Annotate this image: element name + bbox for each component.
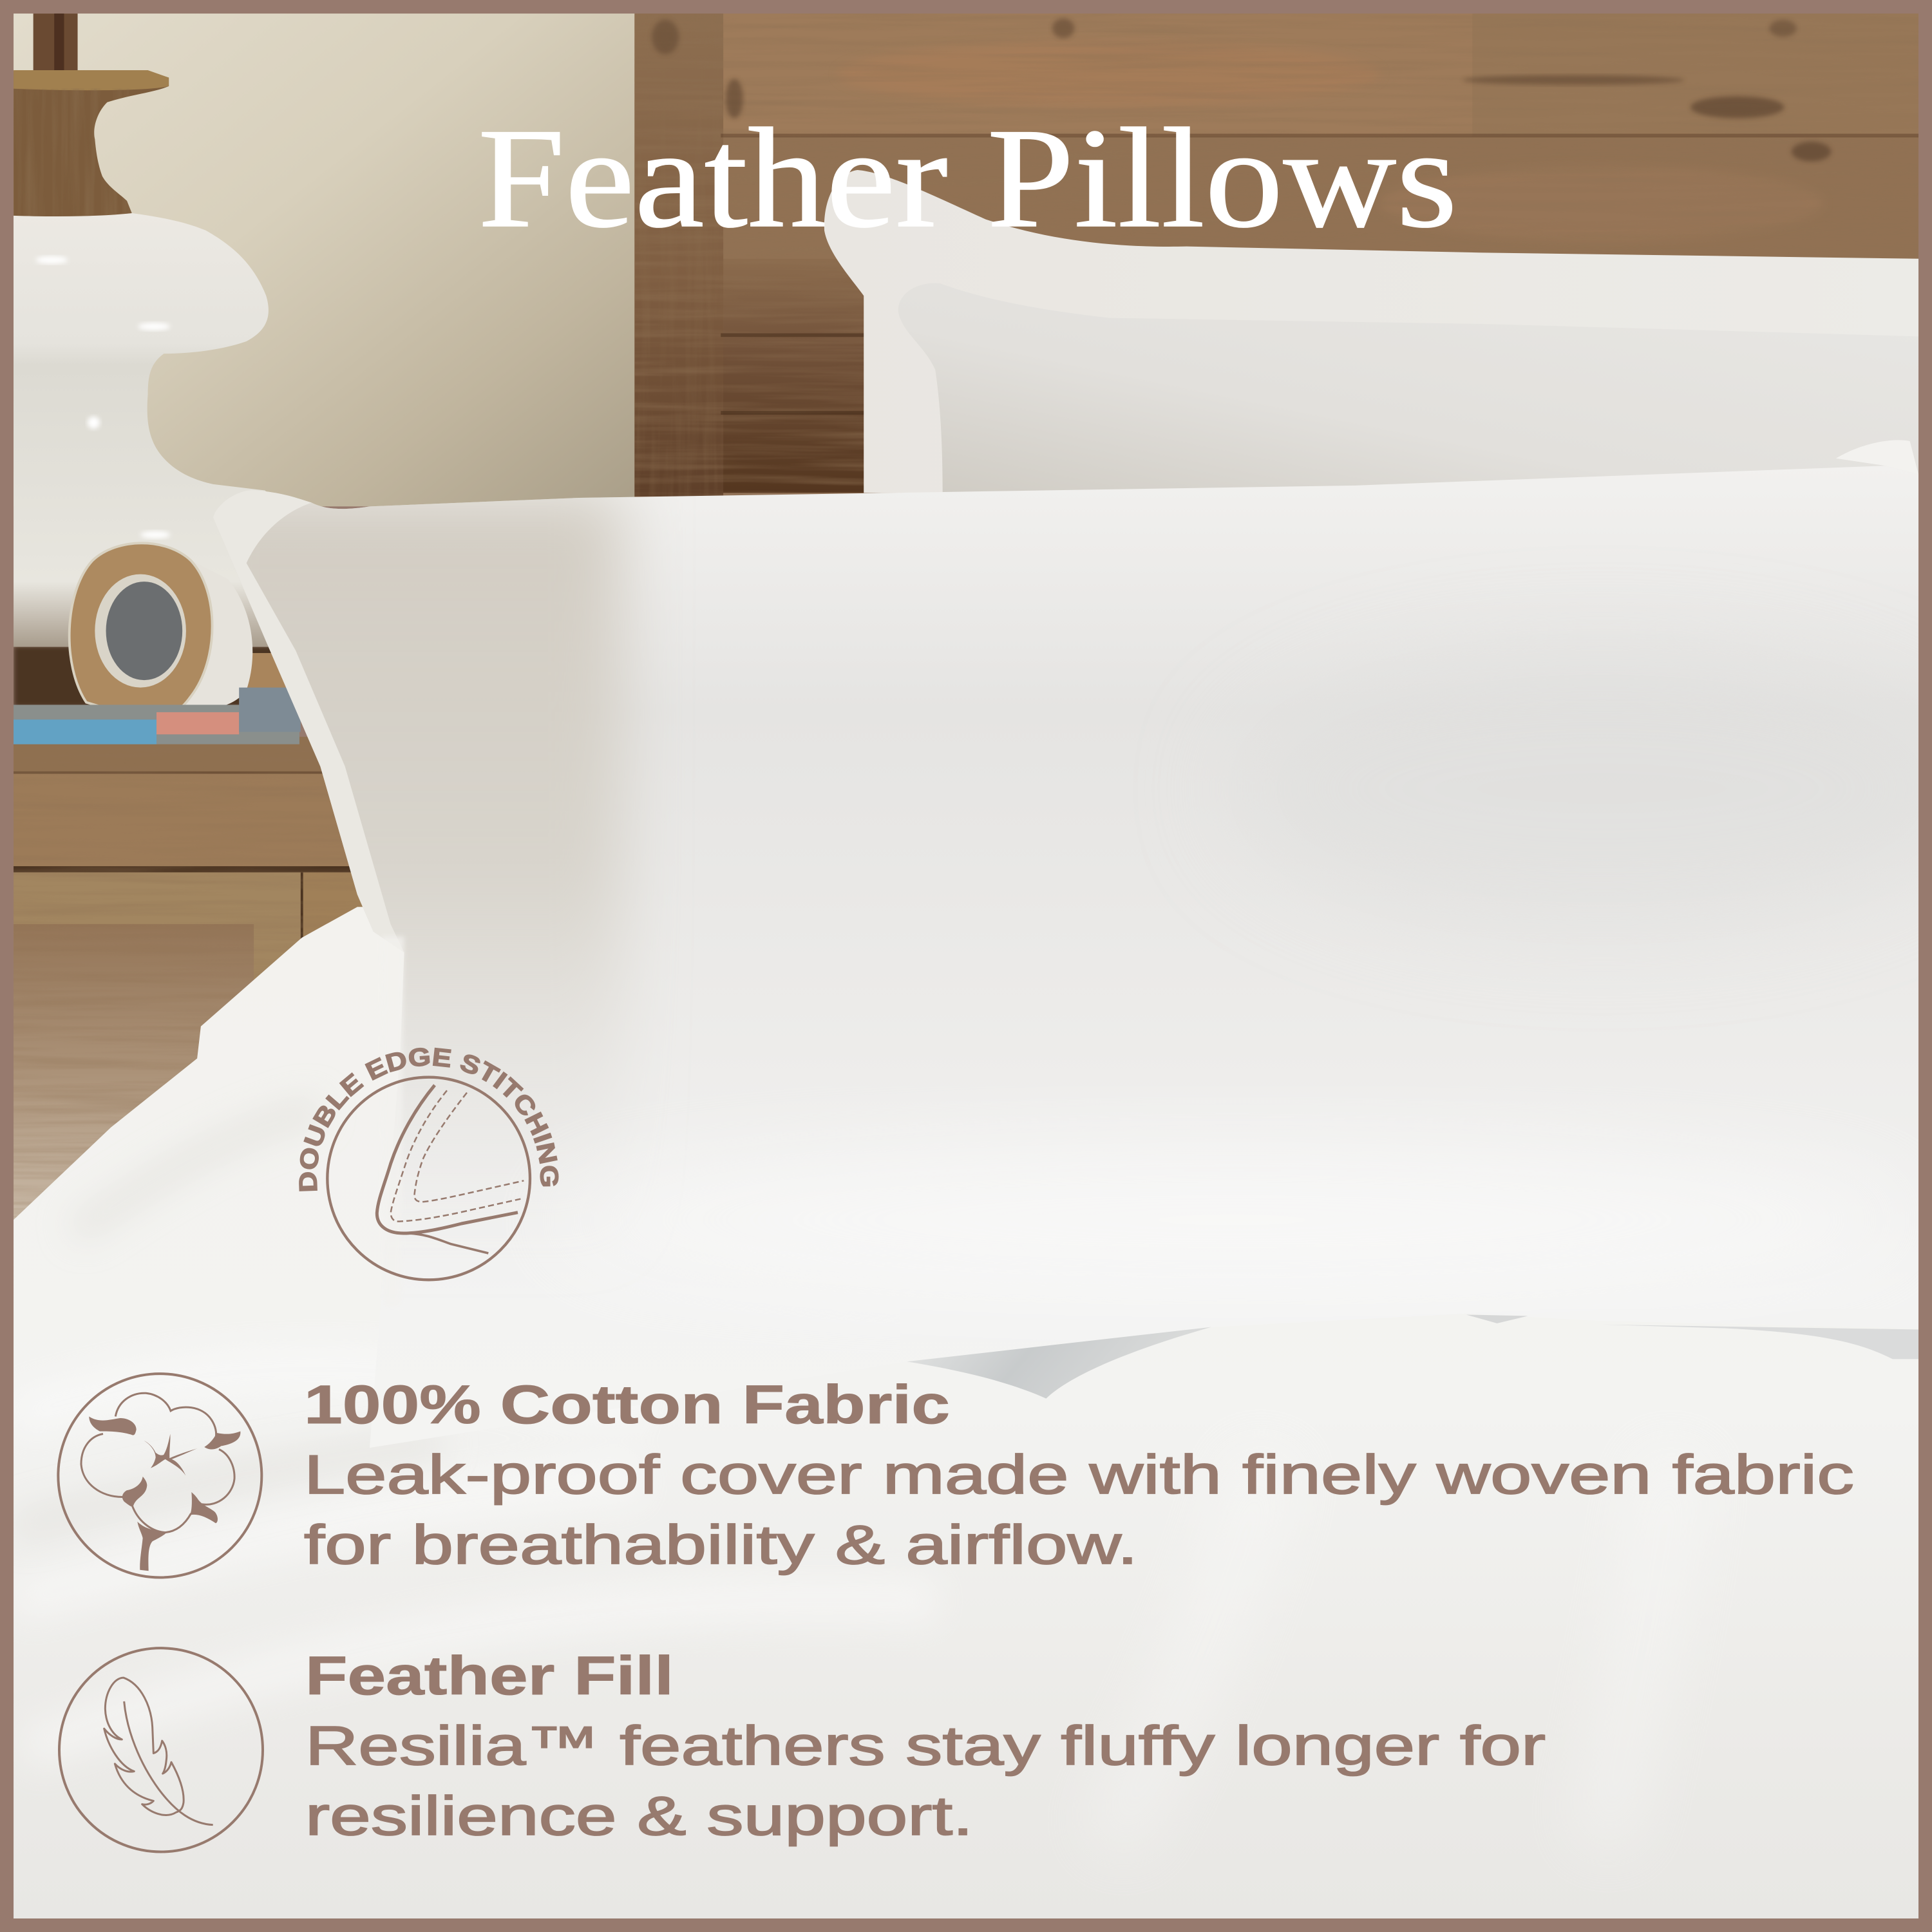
stack of books xyxy=(14,688,301,744)
body: feather fill line 1: Resilia™ feathers stay fluffy longer for xyxy=(305,1716,1546,1777)
badge label arc: DOUBLE EDGE STITCHING xyxy=(299,1047,559,1191)
back pillows xyxy=(824,170,1918,493)
front pillow xyxy=(185,466,1932,1448)
heading: cotton fabric: 100% Cotton Fabric xyxy=(304,1374,950,1435)
icon: feather xyxy=(59,1648,263,1852)
text block: feather fill xyxy=(305,1645,1546,1847)
stitching icon xyxy=(327,1077,530,1280)
nightstand xyxy=(14,646,370,1220)
pillow edge band xyxy=(213,490,404,952)
duvet gaps under pillow xyxy=(907,1314,1918,1399)
badge: double edge stitching xyxy=(299,1047,559,1282)
icon: cotton boll xyxy=(58,1374,261,1577)
wooden headboard xyxy=(634,14,1918,506)
alarm clock xyxy=(70,543,252,712)
heading: feather fill: Feather Fill xyxy=(305,1645,674,1706)
wall xyxy=(14,14,642,506)
table lamp xyxy=(14,14,296,647)
title: Feather Pillows xyxy=(478,99,1457,258)
body: cotton fabric line 2: for breathability & airflow. xyxy=(304,1515,1138,1576)
body: cotton fabric line 1: Leak-proof cover made with finely woven fabric xyxy=(304,1444,1854,1506)
text block: cotton fabric xyxy=(304,1374,1854,1576)
body: feather fill line 2: resilience & support. xyxy=(305,1786,973,1847)
duvet xyxy=(14,907,1918,1918)
